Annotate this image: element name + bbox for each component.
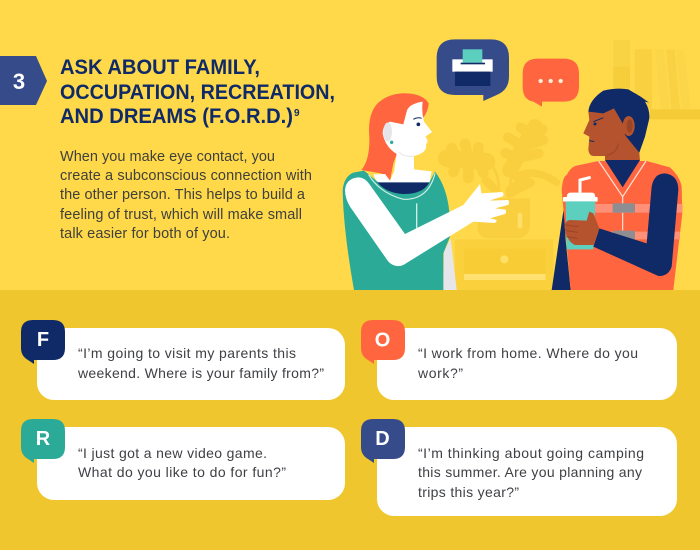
- illustration: two people talking: [340, 39, 700, 300]
- intro text block: talk easier for both of you.: [60, 226, 230, 242]
- card: dreams: this summer. Are you planning any: [418, 464, 642, 480]
- intro text block: feeling of trust, which will make small: [60, 207, 302, 223]
- badge: F: [21, 320, 65, 364]
- woman figure: [343, 93, 509, 290]
- card: recreation: “I just got a new video game.: [78, 445, 267, 461]
- badge: R: [21, 419, 65, 463]
- title: 9: [294, 108, 300, 119]
- step number badge: [0, 56, 47, 105]
- speech bubble: ellipsis: [523, 59, 579, 107]
- card: dreams: trips this year?”: [418, 484, 519, 500]
- card: occupation: “I work from home. Where do you: [418, 345, 638, 361]
- speech bubble: office printer icon: [437, 39, 509, 101]
- cabinet background: [455, 239, 553, 290]
- vase background: [477, 198, 530, 238]
- card: recreation: [21, 419, 345, 500]
- plant background: [447, 127, 557, 197]
- intro text block: [60, 149, 312, 242]
- intro text block: create a subconscious connection with: [60, 168, 312, 184]
- man: neck and head: [583, 103, 640, 161]
- title: ASK ABOUT FAMILY,: [60, 56, 260, 79]
- man: arm: [593, 173, 678, 276]
- man: orange vest: [562, 161, 682, 290]
- intro text block: When you make eye contact, you: [60, 149, 275, 165]
- title: AND DREAMS (F.O.R.D.): [60, 105, 293, 128]
- woman: hair: [361, 93, 429, 181]
- card: dreams: “I’m thinking about going camping: [418, 445, 644, 461]
- badge: D: D: [375, 428, 390, 450]
- man: hair: [588, 89, 649, 153]
- card: family: [21, 320, 345, 400]
- man: hand: [564, 212, 599, 245]
- woman: skirt shadow: [443, 238, 457, 290]
- woman: face and neck: [373, 102, 432, 183]
- badge: O: [361, 320, 405, 364]
- card: recreation: What do you like to do for fun?”: [78, 464, 286, 480]
- step number badge: 3: [13, 69, 25, 94]
- card: family: weekend. Where is your family from?”: [77, 365, 324, 381]
- card: dreams: [361, 419, 677, 516]
- badge: D: [361, 419, 405, 463]
- bookshelf background: [613, 40, 700, 119]
- title: [60, 56, 335, 128]
- title: OCCUPATION, RECREATION,: [60, 81, 335, 104]
- man: vest straps and buckles: [595, 204, 682, 213]
- man: navy under-shirt strip: [552, 207, 571, 290]
- man figure: [552, 89, 682, 290]
- card: occupation: work?”: [417, 365, 463, 381]
- card: occupation: [361, 320, 677, 400]
- badge: O: O: [375, 330, 390, 352]
- intro text block: the other person. This helps to build a: [60, 187, 306, 203]
- man: cup with straw: [580, 177, 591, 193]
- woman: arm and hand: [345, 177, 509, 266]
- card: family: “I’m going to visit my parents this: [78, 345, 296, 361]
- badge: F: F: [37, 329, 49, 351]
- badge: R: R: [36, 428, 51, 450]
- woman: teal top: [343, 171, 450, 290]
- floor edge: [340, 290, 700, 300]
